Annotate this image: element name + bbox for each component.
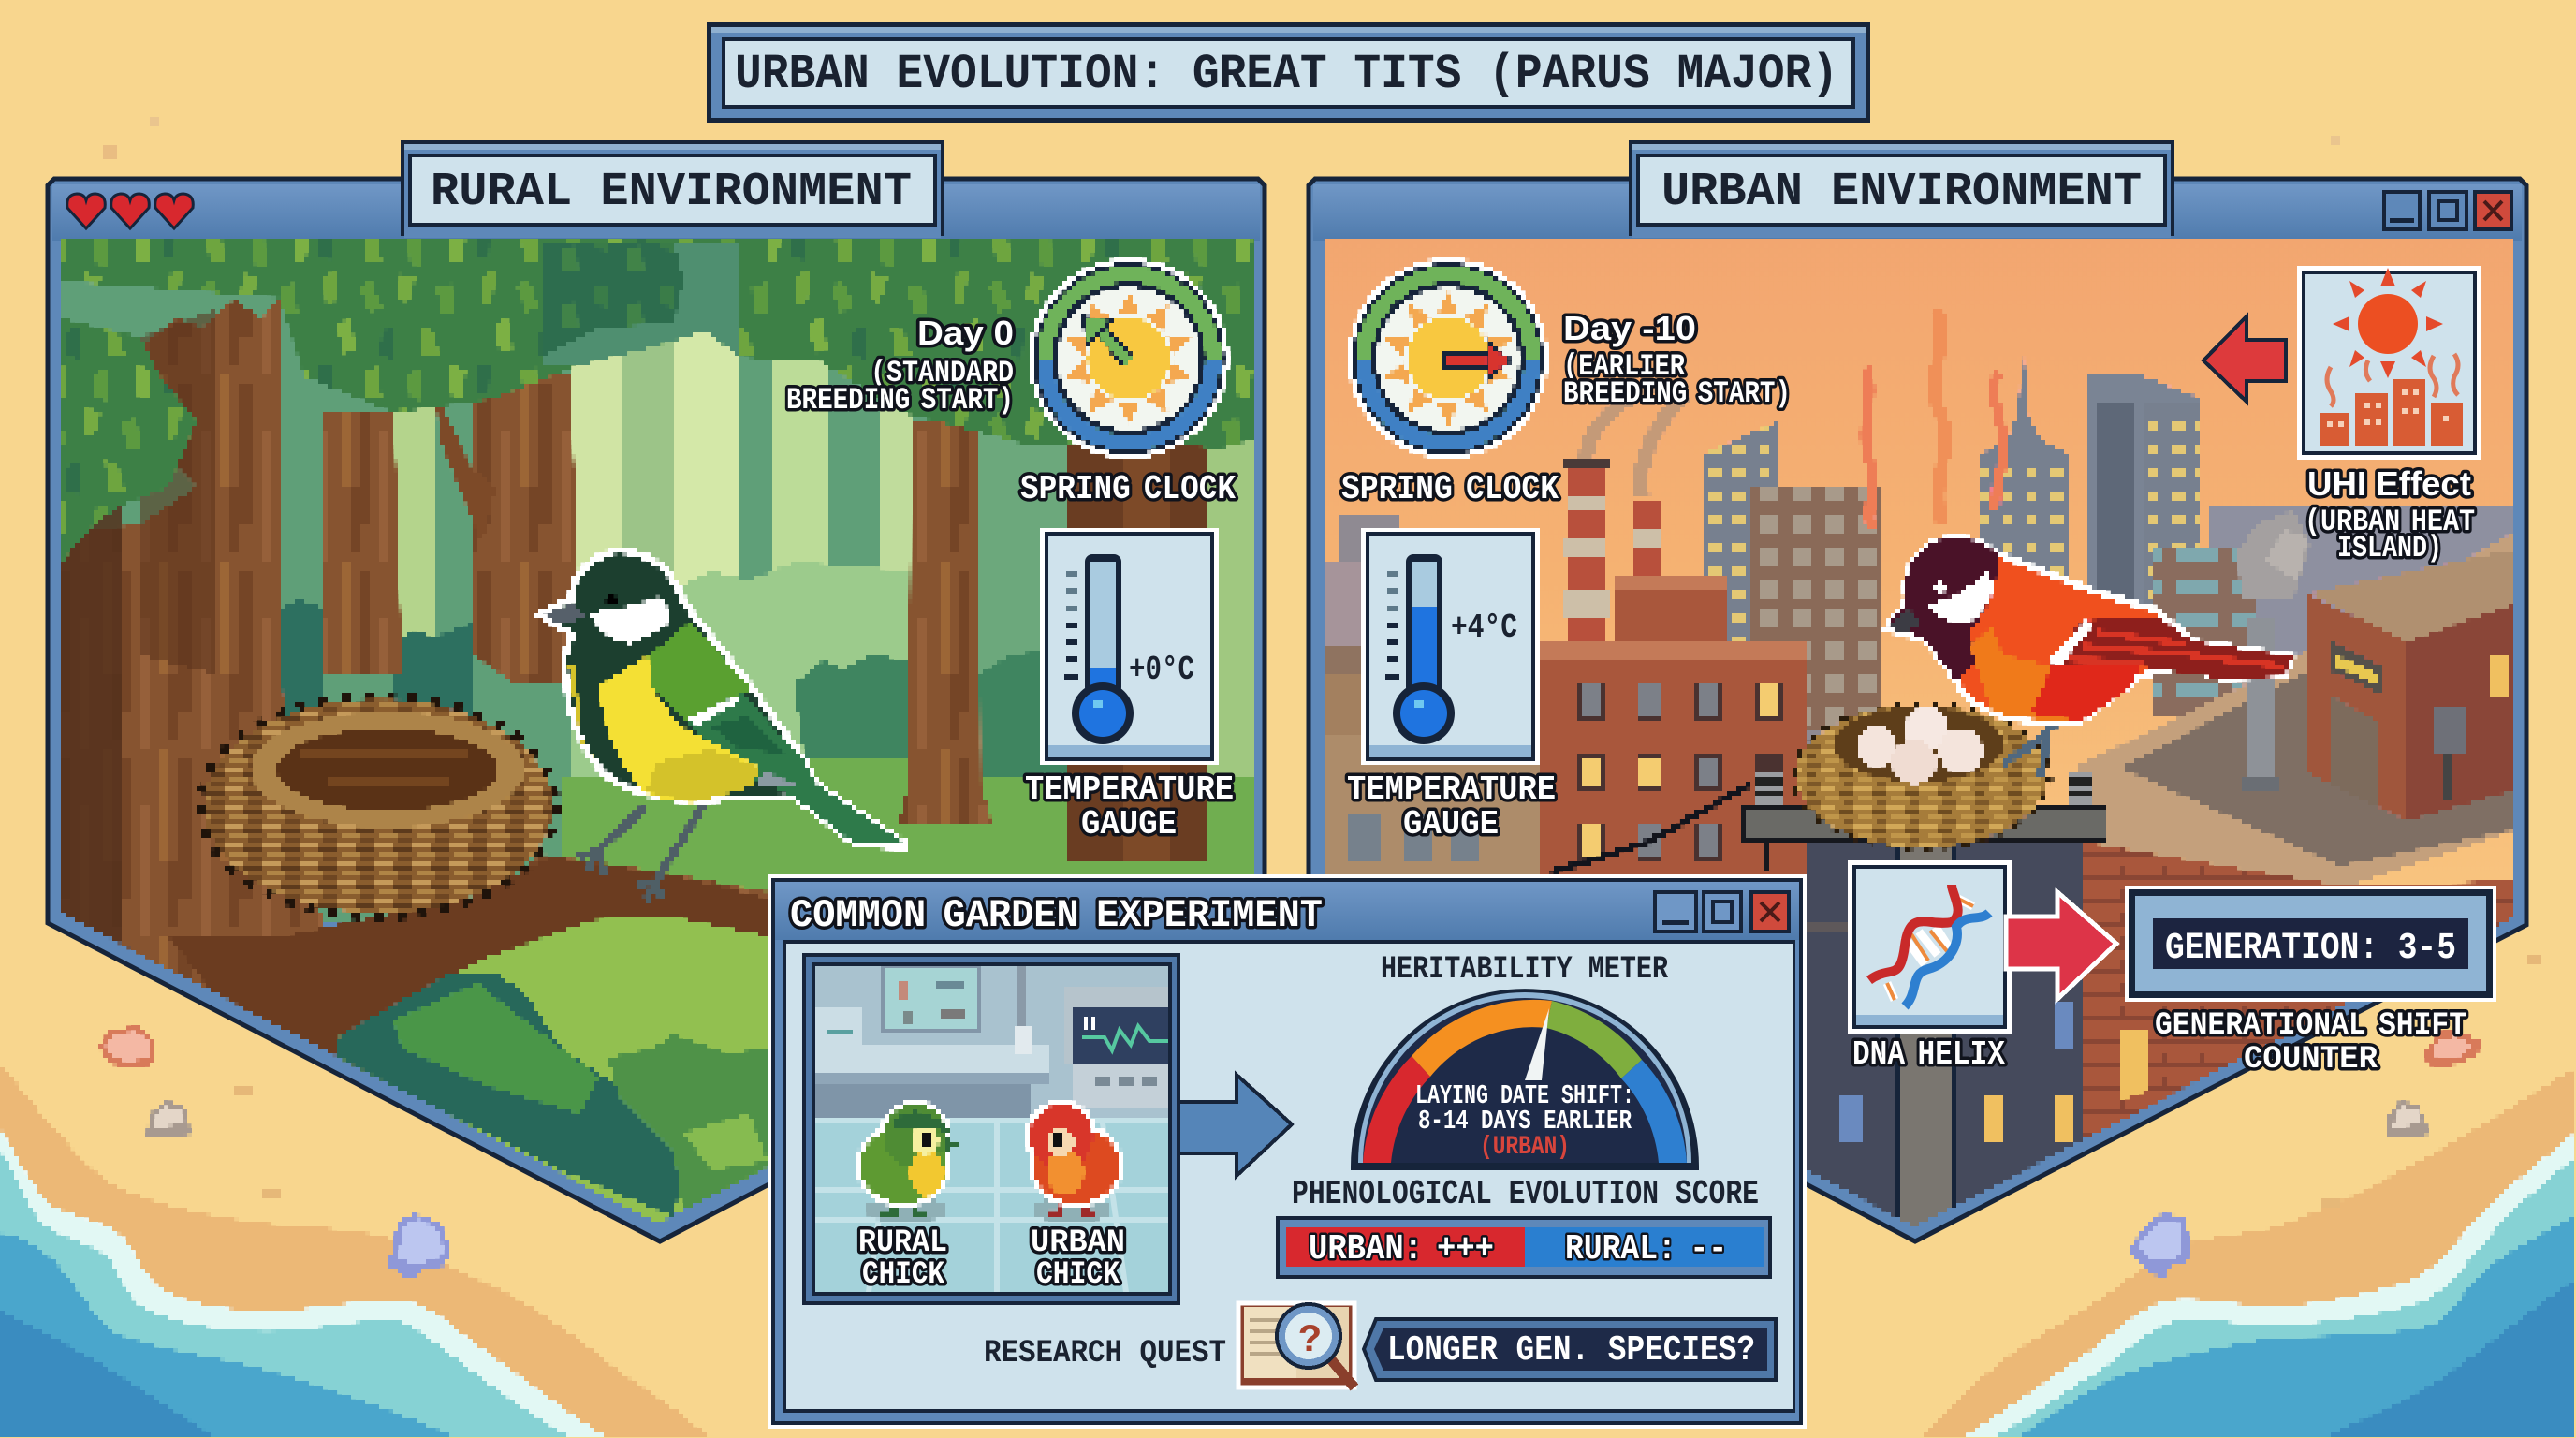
- forest scene: [62, 241, 1254, 1226]
- icon: hearts: [67, 194, 193, 228]
- clock caption: rural: (STANDARD: [871, 356, 1014, 390]
- label: UHI effect: ISLAND): [2337, 531, 2442, 565]
- icon: shell pink left: [98, 1026, 155, 1069]
- label: spring clock urban: SPRING CLOCK: [1341, 470, 1559, 508]
- nest: [200, 696, 556, 917]
- bird: urban great tit: [1886, 538, 2292, 777]
- lower grass: [337, 917, 768, 1222]
- label: temperature gauge urban: TEMPERATURE: [1347, 770, 1556, 809]
- icon: rural chick: [860, 1105, 959, 1223]
- clock caption: urban: BREEDING START): [1563, 376, 1791, 411]
- spring clock: rural: [1029, 258, 1229, 459]
- icon: shell blue left: [388, 1213, 451, 1281]
- heading: urban environment: URBAN ENVIRONMENT: [1661, 166, 2142, 219]
- label: spring clock rural: SPRING CLOCK: [1020, 470, 1236, 508]
- heading: urban environment: [1629, 140, 2174, 238]
- clock caption: urban: Day -10: [1563, 309, 1696, 347]
- rooftop and brick wall: [2077, 510, 2527, 1139]
- heritability gauge: (URBAN): [1480, 1133, 1570, 1162]
- big tree trunk and branch: [61, 300, 768, 1072]
- lab scene frame: [804, 955, 1178, 1303]
- label: generational shift counter: GENERATIONAL SHIFT: [2155, 1008, 2466, 1044]
- icon: window buttons urban: [2384, 192, 2511, 229]
- factory: [1563, 459, 1727, 646]
- canopy: [62, 241, 1252, 449]
- heading: rural environment: RURAL ENVIRONMENT: [431, 166, 912, 219]
- label: UHI effect: [2305, 464, 2475, 565]
- score bar: RURAL: --: [1565, 1229, 1727, 1269]
- generation counter: [2125, 886, 2496, 1002]
- arrow: lab to meter: [1178, 1075, 1292, 1176]
- smoke: [1586, 384, 1685, 496]
- icon: shell grey left: [146, 1101, 192, 1137]
- city scene: [1325, 241, 2527, 1236]
- score bar: [1276, 1216, 1772, 1279]
- clock caption: rural: Day 0: [917, 314, 1014, 352]
- arrow: DNA to generation: [2006, 892, 2116, 999]
- label: temperature gauge rural: [1025, 770, 1234, 844]
- label: generational shift counter: COUNTER: [2244, 1042, 2378, 1078]
- tan building left: [1325, 646, 1544, 885]
- heritability gauge: LAYING DATE SHIFT:: [1415, 1080, 1634, 1111]
- clock caption: urban: (EARLIER: [1563, 349, 1686, 384]
- brick factory building: [1541, 639, 1843, 883]
- label: temperature gauge urban: [1347, 770, 1556, 844]
- research quest box: [1364, 1319, 1776, 1380]
- temperature gauge: urban: +4°C: [1451, 609, 1517, 647]
- clock caption: rural: [786, 314, 1014, 418]
- label: generational shift counter: [2155, 1008, 2466, 1078]
- label: rural chick: RURAL: [858, 1225, 947, 1261]
- heritability gauge: [1351, 989, 1699, 1170]
- title: [707, 22, 1870, 123]
- icon: shell pink right: [2422, 1030, 2481, 1067]
- label: phenological evolution score: PHENOLOGICAL EVOLUTION SCORE: [1292, 1175, 1759, 1213]
- bird: rural great tit: [538, 550, 903, 901]
- heading: common garden experiment: COMMON GARDEN EXPERIMENT: [790, 893, 1323, 938]
- label: temperature gauge rural: TEMPERATURE: [1025, 770, 1234, 809]
- dark building and pole: [1806, 842, 2082, 1236]
- heading: rural environment: [401, 140, 944, 238]
- icon: book with magnifier: [1238, 1303, 1354, 1387]
- icon: shell grey right: [2385, 1101, 2430, 1137]
- background trunks: [324, 376, 1208, 861]
- panel: urban environment: [1309, 179, 2527, 1241]
- clock caption: urban: [1563, 309, 1791, 411]
- label: rural chick: CHICK: [862, 1257, 945, 1293]
- temperature gauge: rural: [1040, 528, 1219, 765]
- nest with eggs: [1794, 705, 2049, 847]
- label: temperature gauge rural: GAUGE: [1081, 805, 1177, 844]
- icon: urban chick: [1030, 1105, 1120, 1223]
- panel: rural environment: [48, 179, 1265, 1241]
- icon: DNA helix card: [1848, 860, 2012, 1034]
- icon: shell blue right: [2129, 1213, 2190, 1281]
- icon: book with magnifier: ?: [1298, 1318, 1322, 1363]
- label: urban chick: CHICK: [1036, 1257, 1120, 1293]
- arrow: UHI to city: [2203, 316, 2286, 402]
- label: heritability meter: HERITABILITY METER: [1381, 952, 1668, 988]
- score bar: URBAN: +++: [1309, 1229, 1494, 1269]
- wire and beam: [1551, 771, 2108, 873]
- temperature gauge: urban: [1361, 528, 1540, 765]
- label: rural chick: [858, 1225, 947, 1293]
- lab interior: [815, 964, 1168, 1292]
- label: urban chick: [1031, 1225, 1125, 1293]
- heritability gauge: 8-14 DAYS EARLIER: [1418, 1106, 1632, 1137]
- label: temperature gauge urban: GAUGE: [1403, 805, 1499, 844]
- skyline: [1325, 309, 2513, 741]
- clock caption: rural: BREEDING START): [786, 383, 1014, 418]
- icon: UHI effect card: [2297, 266, 2481, 460]
- panel: common garden experiment: [768, 874, 1807, 1429]
- temperature gauge: rural: +0°C: [1129, 651, 1194, 689]
- label: research quest: RESEARCH QUEST: [984, 1336, 1226, 1372]
- icon: window buttons experiment: [1655, 892, 1789, 932]
- spring clock: urban: [1348, 258, 1548, 459]
- label: DNA helix: DNA HELIX: [1852, 1035, 2005, 1074]
- label: UHI effect: (URBAN HEAT: [2305, 505, 2475, 539]
- title: URBAN EVOLUTION: GREAT TITS (PARUS MAJOR): [735, 47, 1838, 102]
- generation counter: GENERATION: 3-5: [2165, 928, 2456, 970]
- label: urban chick: URBAN: [1031, 1225, 1125, 1261]
- label: UHI effect: UHI Effect: [2307, 464, 2471, 503]
- research quest box: LONGER GEN. SPECIES?: [1387, 1330, 1755, 1371]
